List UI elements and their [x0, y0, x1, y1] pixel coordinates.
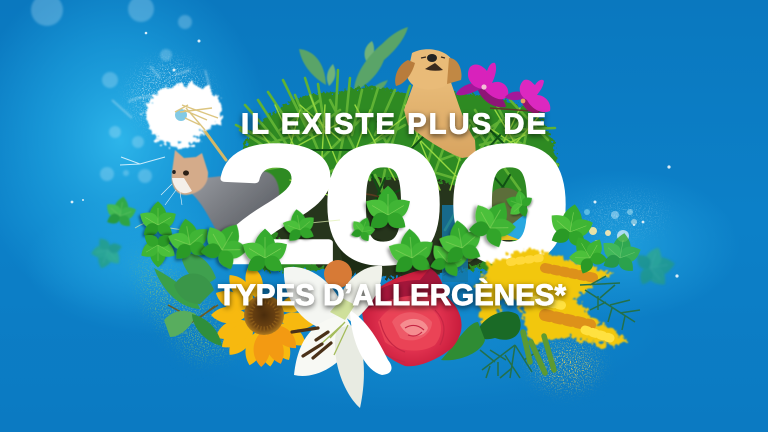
- rose: [362, 268, 462, 366]
- fern sprigs: [299, 27, 408, 104]
- grass and fern sprigs: [236, 27, 558, 282]
- large dark leaves and catkins: [441, 312, 554, 373]
- lily: [284, 266, 392, 408]
- heading top: IL EXISTE PLUS DE: [241, 108, 546, 140]
- dog: [395, 49, 476, 158]
- faint leaves: [85, 233, 679, 293]
- ferns: [480, 276, 640, 378]
- dandelion: [112, 66, 226, 165]
- orchids: [456, 63, 550, 113]
- mimosa: [478, 248, 626, 347]
- grass mass: [236, 87, 557, 270]
- green leaf clusters: [100, 185, 647, 283]
- heading bottom: TYPES D’ALLERGÈNES*: [218, 278, 566, 312]
- orange fruit: [324, 260, 352, 288]
- big number 200: 200: [216, 112, 570, 296]
- sunflower: [211, 263, 316, 368]
- scene inside the second zero: [450, 188, 530, 262]
- cat: [161, 150, 279, 250]
- left leaf branch: [154, 254, 222, 346]
- bokeh lights and speckles: [31, 0, 679, 387]
